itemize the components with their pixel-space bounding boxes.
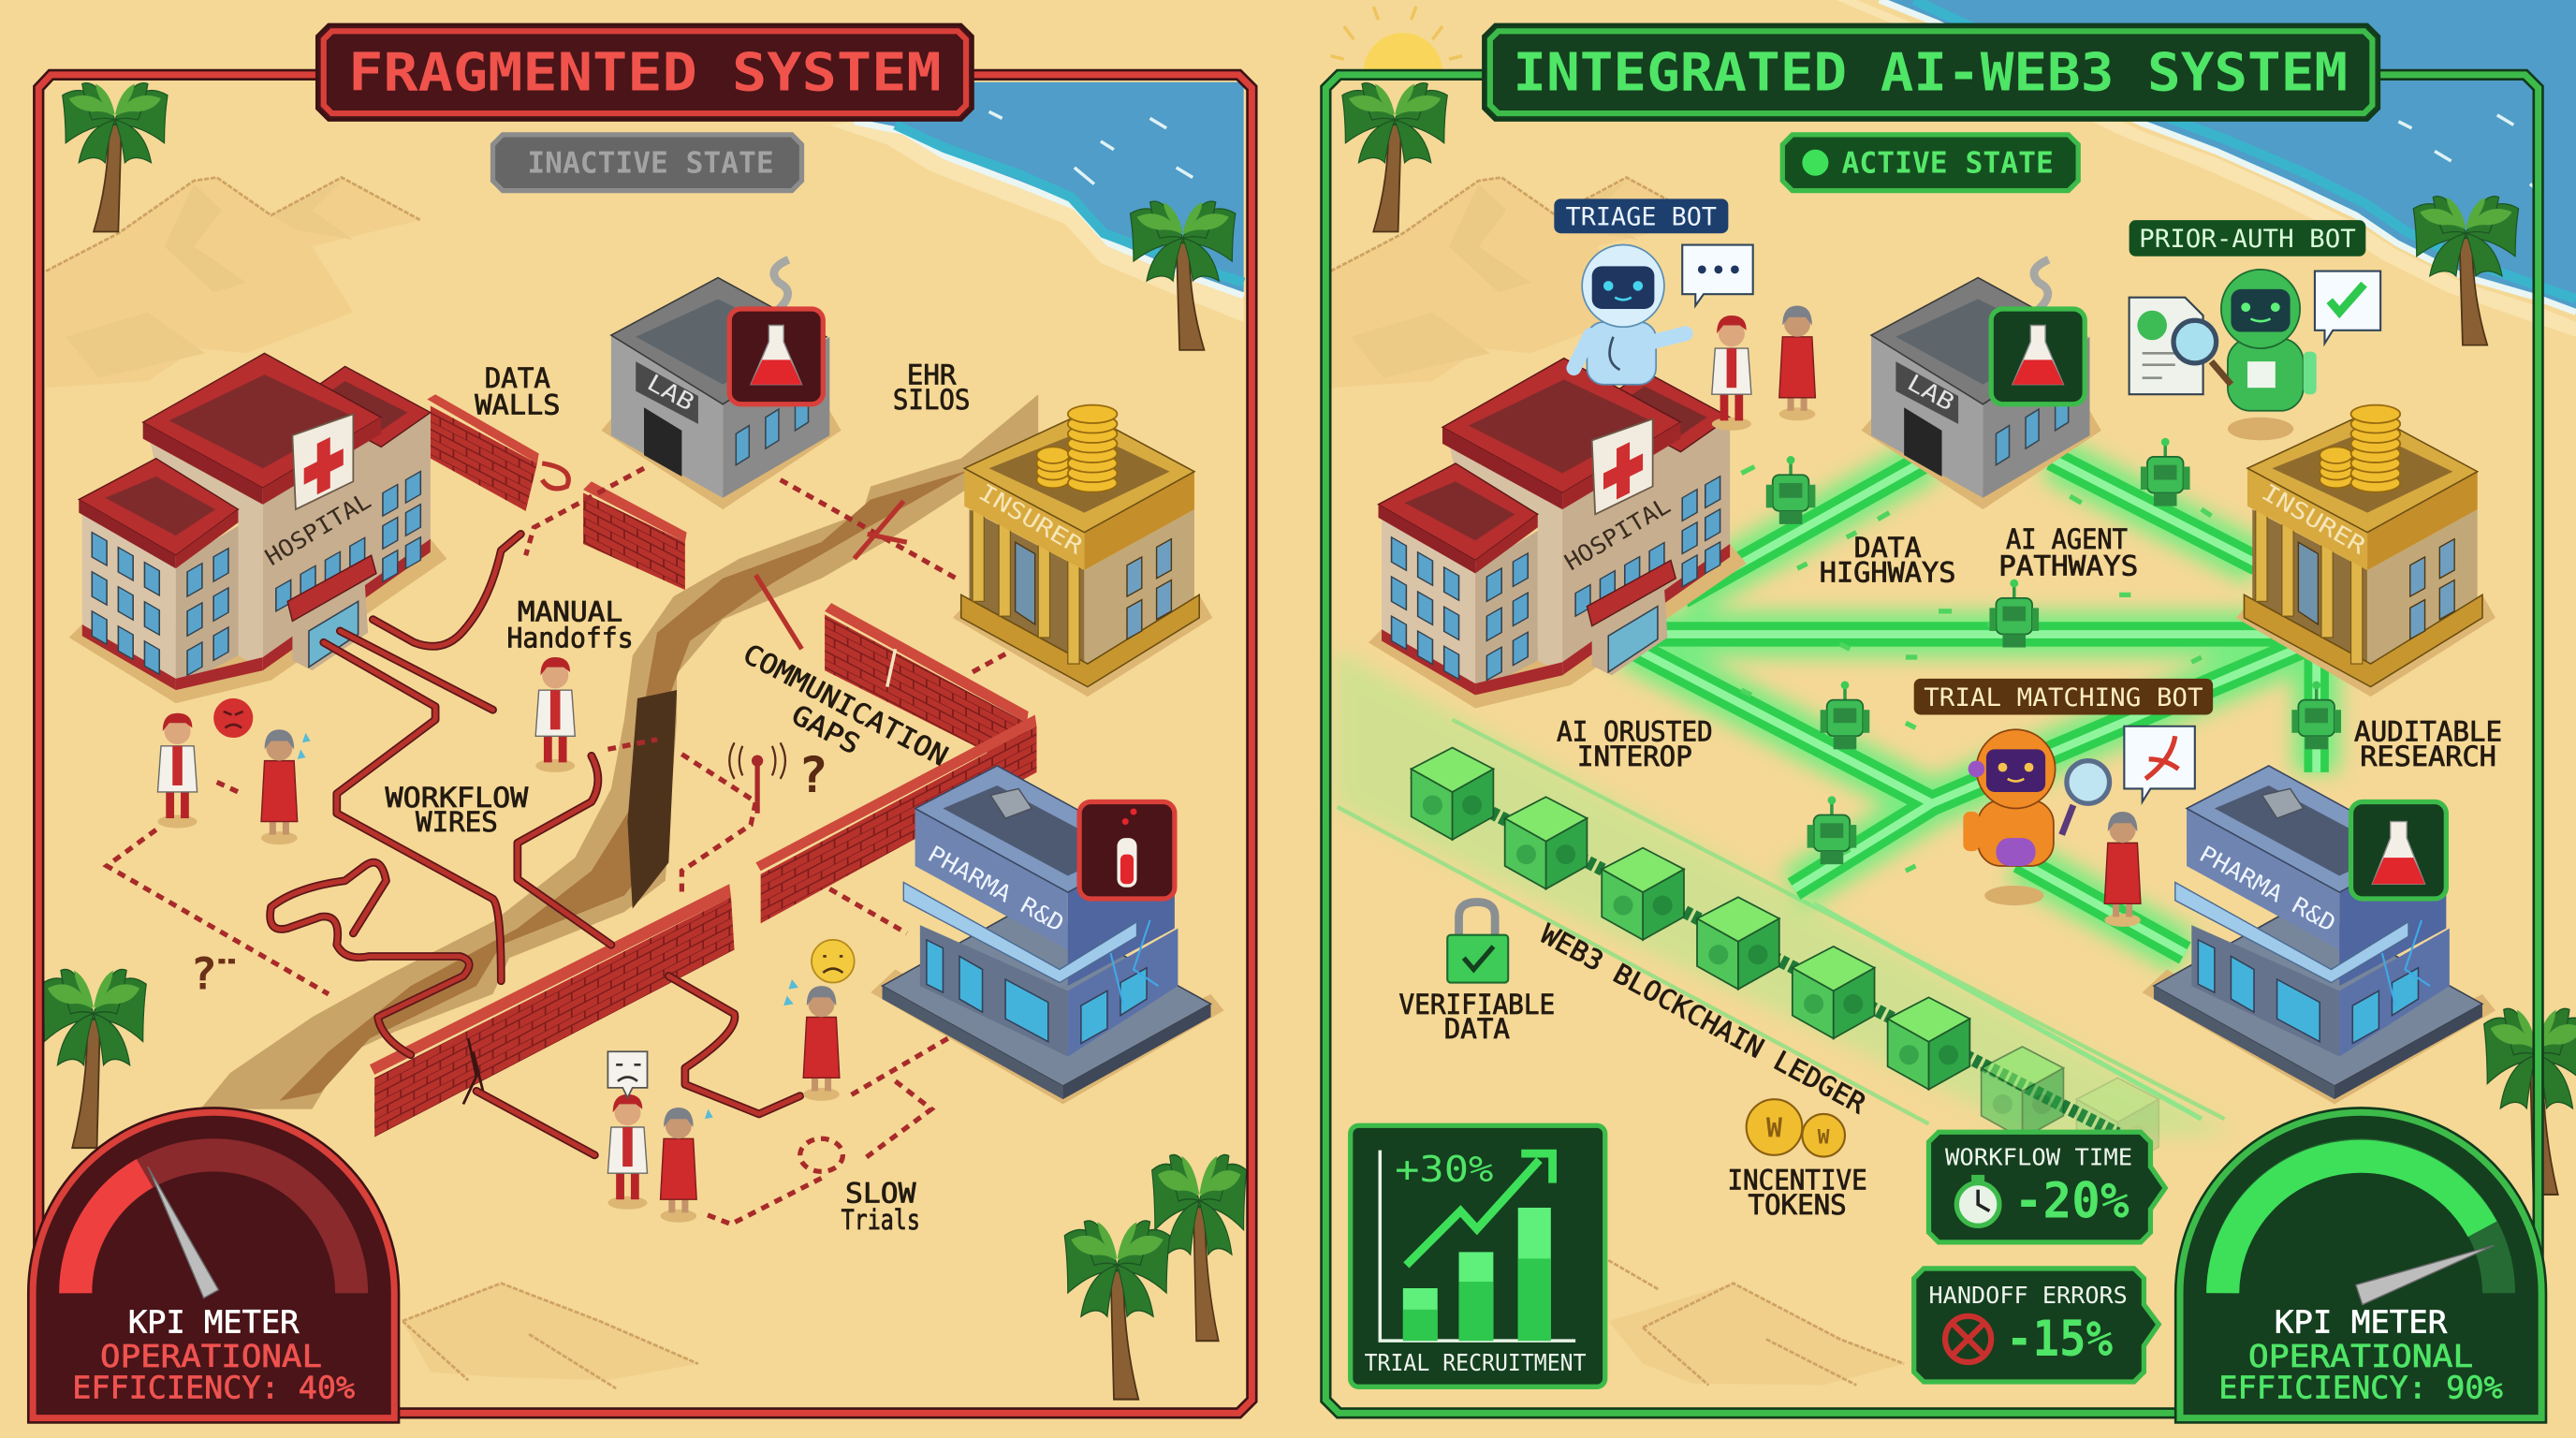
callout: workflow time: WORKFLOW TIME [1945, 1143, 2132, 1170]
title: fragmented system: FRAGMENTED SYSTEM [348, 43, 942, 104]
triage bot label [1554, 198, 1728, 233]
canyon crack [200, 394, 1038, 1109]
incentive tokens: W [1766, 1113, 1782, 1144]
callout: handoff errors: HANDOFF ERRORS [1928, 1282, 2128, 1309]
labels: fragmented: WALLS [475, 389, 560, 420]
sand dunes: bottom [1608, 1260, 1904, 1386]
callout: handoff errors [1914, 1269, 2159, 1382]
blockchain glow band [1334, 649, 2234, 1142]
KPI gauge: 90%: KPI METER [2275, 1303, 2448, 1340]
sand dunes: bottom [402, 1284, 698, 1388]
labels: fragmented: COMMUNICATION [738, 638, 953, 772]
panel frame highlight: integrated [1325, 75, 2539, 1413]
badge: test tube [1079, 801, 1175, 899]
gauge track [2223, 1155, 2499, 1293]
badge: flask [729, 309, 823, 404]
prior-auth bot [2130, 270, 2380, 440]
emotes [213, 698, 855, 1119]
smoke [774, 259, 788, 312]
title: integrated AI-Web3 system: INTEGRATED AI-WEB3 SYSTEM [1513, 43, 2348, 104]
labels: fragmented: WIRES [416, 806, 498, 838]
gauge value [76, 1173, 144, 1293]
callout: handoff errors: -15% [2006, 1311, 2113, 1368]
status badge: inactive state [493, 135, 801, 191]
labels: fragmented: SLOW [845, 1178, 916, 1210]
lab: fragmented: LAB [643, 369, 699, 417]
labels: fragmented: GAPS [786, 698, 865, 760]
trial matching bot label: TRIAL MATCHING BOT [1924, 684, 2203, 712]
labels: integrated: DATA [1854, 532, 1922, 564]
hospital: fragmented: HOSPITAL [260, 487, 375, 571]
hospital: fragmented [69, 353, 446, 703]
trial recruitment chart: TRIAL RECRUITMENT [1365, 1349, 1587, 1376]
lab: integrated: LAB [1903, 369, 1959, 417]
labels: integrated: HIGHWAYS [1820, 556, 1955, 588]
patients and doctors [157, 657, 840, 1223]
labels: integrated: WEB3 BLOCKCHAIN LEDGER [1535, 917, 1871, 1120]
labels: fragmented: MANUAL [518, 595, 622, 627]
dotted communication paths [107, 468, 1005, 1225]
trial matching bot label [1914, 679, 2213, 714]
stopwatch icon [1956, 1175, 1999, 1225]
badge: flask [2351, 801, 2446, 899]
verifiable data lock [1447, 902, 1508, 983]
badge: flask [1991, 309, 2085, 404]
pharma: fragmented: PHARMA R&D [924, 840, 1069, 937]
people: integrated [1712, 305, 2141, 927]
labels: integrated [1398, 523, 2502, 1221]
labels: integrated: TOKENS [1748, 1189, 1847, 1221]
pharma: fragmented [871, 766, 1224, 1104]
data walls [370, 394, 1036, 1137]
callout: workflow time: -20% [2014, 1173, 2130, 1230]
sun [1331, 7, 1462, 72]
insurer: fragmented [953, 405, 1212, 697]
labels: integrated: AI AGENT [2006, 523, 2128, 555]
labels: integrated: AI ORUSTED [1557, 716, 1713, 748]
triage bot [1573, 245, 1753, 385]
lab: fragmented [601, 259, 842, 509]
KPI gauge: 40%: OPERATIONAL [100, 1338, 322, 1374]
insurer: fragmented: INSURER [974, 478, 1088, 560]
panel: integrated system [1325, 0, 2576, 1418]
title: integrated AI-Web3 system [1484, 24, 2378, 120]
gauge track [76, 1155, 352, 1293]
labels: fragmented: DATA [485, 362, 550, 394]
labels: integrated: VERIFIABLE [1398, 989, 1555, 1020]
smoke [2034, 259, 2049, 312]
panel frame: fragmented [38, 75, 1251, 1413]
KPI gauge: 40%: KPI METER [128, 1303, 300, 1340]
ocean: integrated panel [1837, 0, 2576, 337]
growth arrow [1406, 1153, 1553, 1265]
insurer: integrated [2236, 405, 2496, 697]
KPI gauge: 90%: EFFICIENCY: 90% [2218, 1370, 2503, 1406]
KPI gauge: 90% [2180, 1112, 2541, 1418]
sand dunes: top left [46, 178, 420, 388]
prior-auth bot label: PRIOR-AUTH BOT [2139, 226, 2356, 254]
triage bot label: TRIAGE BOT [1566, 203, 1717, 231]
needle [148, 1167, 218, 1299]
labels: integrated: INCENTIVE [1727, 1165, 1867, 1196]
title: fragmented system [317, 24, 973, 120]
labels: fragmented [386, 360, 970, 1236]
labels: integrated: INTEROP [1577, 741, 1692, 772]
labels: integrated: RESEARCH [2360, 741, 2496, 772]
sand dunes: top left [1331, 178, 1705, 388]
labels: fragmented: Handoffs [506, 623, 634, 654]
gauge value [2223, 1156, 2482, 1293]
broken links [542, 463, 907, 649]
labels: integrated: AUDITABLE [2354, 716, 2502, 748]
incentive tokens [1747, 1099, 1845, 1157]
pharma: integrated: PHARMA R&D [2195, 840, 2340, 937]
hospital: integrated: HOSPITAL [1559, 492, 1676, 576]
error icon [1945, 1316, 1991, 1362]
status badge: active state: ACTIVE STATE [1841, 146, 2054, 180]
lab: integrated [1862, 259, 2101, 509]
labels: fragmented: SILOS [893, 384, 970, 416]
callout: workflow time [1928, 1132, 2165, 1242]
hospital: integrated [1368, 359, 1747, 708]
signal and question marks [190, 742, 828, 1001]
trial recruitment chart [1351, 1125, 1605, 1387]
insurer: integrated: INSURER [2257, 478, 2371, 560]
trial recruitment chart: +30% [1395, 1149, 1493, 1191]
needle [2356, 1245, 2494, 1305]
palm trees [41, 83, 1247, 1400]
status badge: inactive state: INACTIVE STATE [527, 146, 774, 180]
KPI gauge: 40%: EFFICIENCY: 40% [72, 1370, 355, 1406]
signal and question marks: ? [190, 949, 217, 1001]
trial matching bot [1963, 726, 2195, 905]
blockchain ledger [1338, 720, 2224, 1170]
incentive tokens: W [1818, 1125, 1830, 1149]
labels: fragmented: Trials [842, 1204, 920, 1236]
palm trees [1342, 83, 2576, 1195]
prior-auth bot label [2130, 220, 2365, 257]
glowing data highways [1627, 459, 2317, 1119]
labels: fragmented: EHR [907, 360, 957, 391]
labels: integrated: PATHWAYS [1998, 550, 2138, 581]
KPI gauge: 40% [33, 1112, 394, 1418]
labels: integrated: DATA [1444, 1013, 1510, 1045]
bars [1403, 1208, 1551, 1341]
ocean: fragmented panel [829, 82, 1244, 322]
workflow wires [271, 534, 800, 1155]
panel frame highlight: fragmented [38, 75, 1251, 1413]
panel: fragmented system [33, 24, 1251, 1418]
pharma: integrated [2143, 766, 2496, 1104]
mini AI agents [1766, 438, 2341, 864]
panel frame: integrated [1325, 75, 2539, 1413]
labels: fragmented: WORKFLOW [386, 782, 529, 814]
signal and question marks: ? [798, 747, 828, 804]
status badge: active state [1782, 135, 2078, 191]
KPI gauge: 90%: OPERATIONAL [2248, 1338, 2473, 1374]
